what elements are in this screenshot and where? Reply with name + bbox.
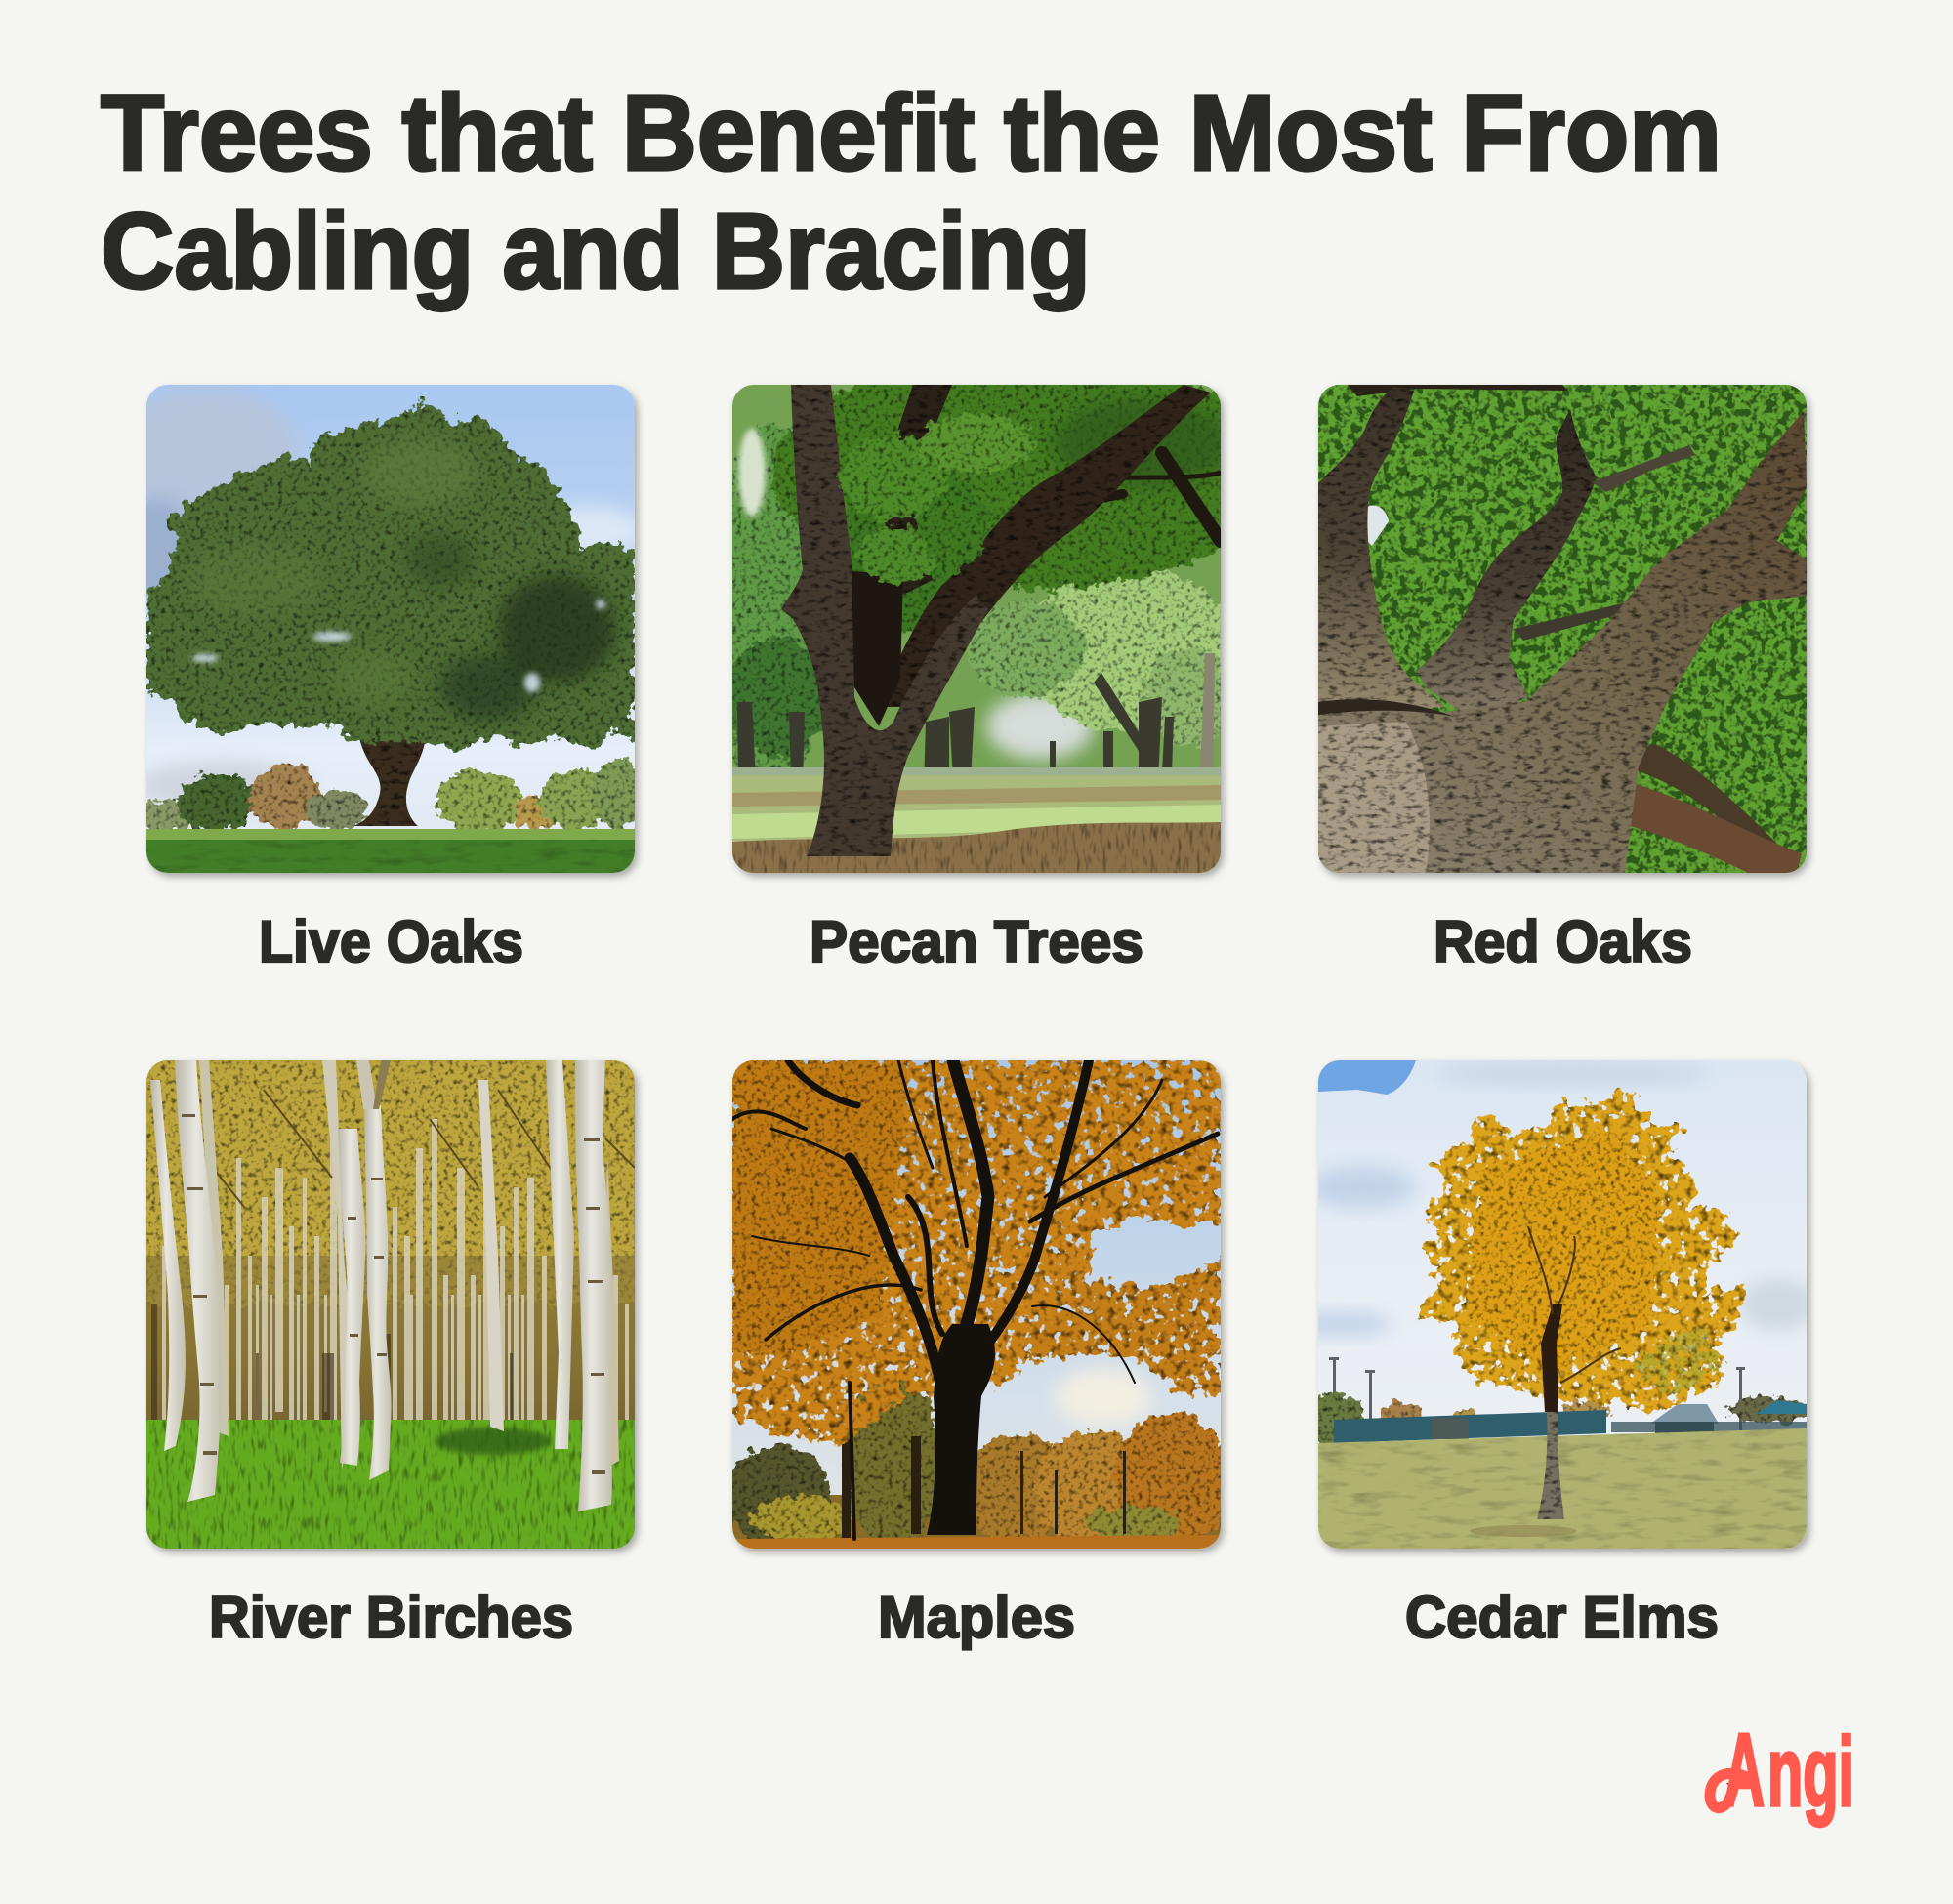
label: River Birches: River Birches	[209, 1585, 573, 1650]
right limb and main trunk	[1318, 411, 1807, 873]
inner trunk	[1541, 1304, 1562, 1412]
bright lower-left bark	[1318, 722, 1430, 873]
logo: Angi: A	[1724, 1713, 1765, 1828]
photo: live oak	[112, 385, 647, 873]
grass	[146, 1420, 635, 1549]
label: Red Oaks: Red Oaks	[1434, 909, 1692, 974]
distant trunks	[737, 673, 1174, 767]
medium trunks	[150, 1080, 186, 1451]
trunk	[1537, 1412, 1564, 1519]
background trees	[137, 760, 647, 834]
trunk	[353, 738, 426, 826]
label: Maples: Maples	[878, 1585, 1075, 1650]
thin background trunks	[162, 1119, 629, 1441]
label: Cedar Elms: Cedar Elms	[1405, 1585, 1719, 1650]
logo: Angi: ngi	[1767, 1718, 1854, 1827]
photo: autumn maple	[723, 1060, 1230, 1549]
title	[101, 73, 1722, 311]
main trunk	[781, 385, 988, 856]
bark marks	[182, 1114, 605, 1474]
middle limb	[1417, 409, 1597, 722]
panel: River Birches	[146, 1060, 635, 1650]
light poles	[1329, 1357, 1745, 1431]
sky gaps	[191, 600, 605, 692]
photo: birch grove	[146, 1060, 635, 1549]
logo swash	[1710, 1773, 1748, 1808]
title: Trees that Benefit the Most From	[101, 73, 1722, 193]
logo: Angi	[1710, 1713, 1854, 1828]
lawn	[1318, 1428, 1807, 1549]
label: Pecan Trees: Pecan Trees	[810, 909, 1143, 974]
canopy shading	[186, 438, 615, 721]
panel: Red Oaks	[1309, 375, 1816, 974]
distant trunks	[842, 1431, 1126, 1539]
front leaves	[840, 414, 1035, 585]
canopy	[732, 1060, 1221, 1446]
lower branches	[1636, 744, 1777, 844]
canopy	[1418, 1090, 1743, 1414]
label: Live Oaks: Live Oaks	[259, 909, 523, 974]
distant autumn trees	[732, 1495, 1221, 1544]
photo: pecan orchard	[730, 384, 1228, 882]
large front trunks	[175, 1060, 222, 1502]
ground	[732, 770, 1221, 873]
trunk and limbs	[732, 1060, 1218, 1539]
canopy	[146, 401, 635, 750]
panel: Cedar Elms	[1294, 1060, 1816, 1650]
foliage layers	[732, 385, 1221, 767]
distant trees	[1300, 1392, 1807, 1447]
title: Cabling and Bracing	[101, 191, 1091, 311]
photo: cedar elm in park	[1294, 1060, 1816, 1549]
photo: red oak limbs	[1309, 375, 1816, 883]
panel: Pecan Trees	[730, 384, 1228, 964]
branches	[205, 1090, 635, 1207]
fence	[1334, 1410, 1606, 1443]
panel: Maples	[723, 1060, 1230, 1650]
grass	[146, 829, 635, 840]
secondary limbs	[1103, 446, 1221, 548]
panel: Live Oaks	[112, 385, 647, 974]
pavilions	[1650, 1404, 1719, 1424]
left limb	[1318, 387, 1445, 717]
limbs	[879, 385, 1211, 707]
